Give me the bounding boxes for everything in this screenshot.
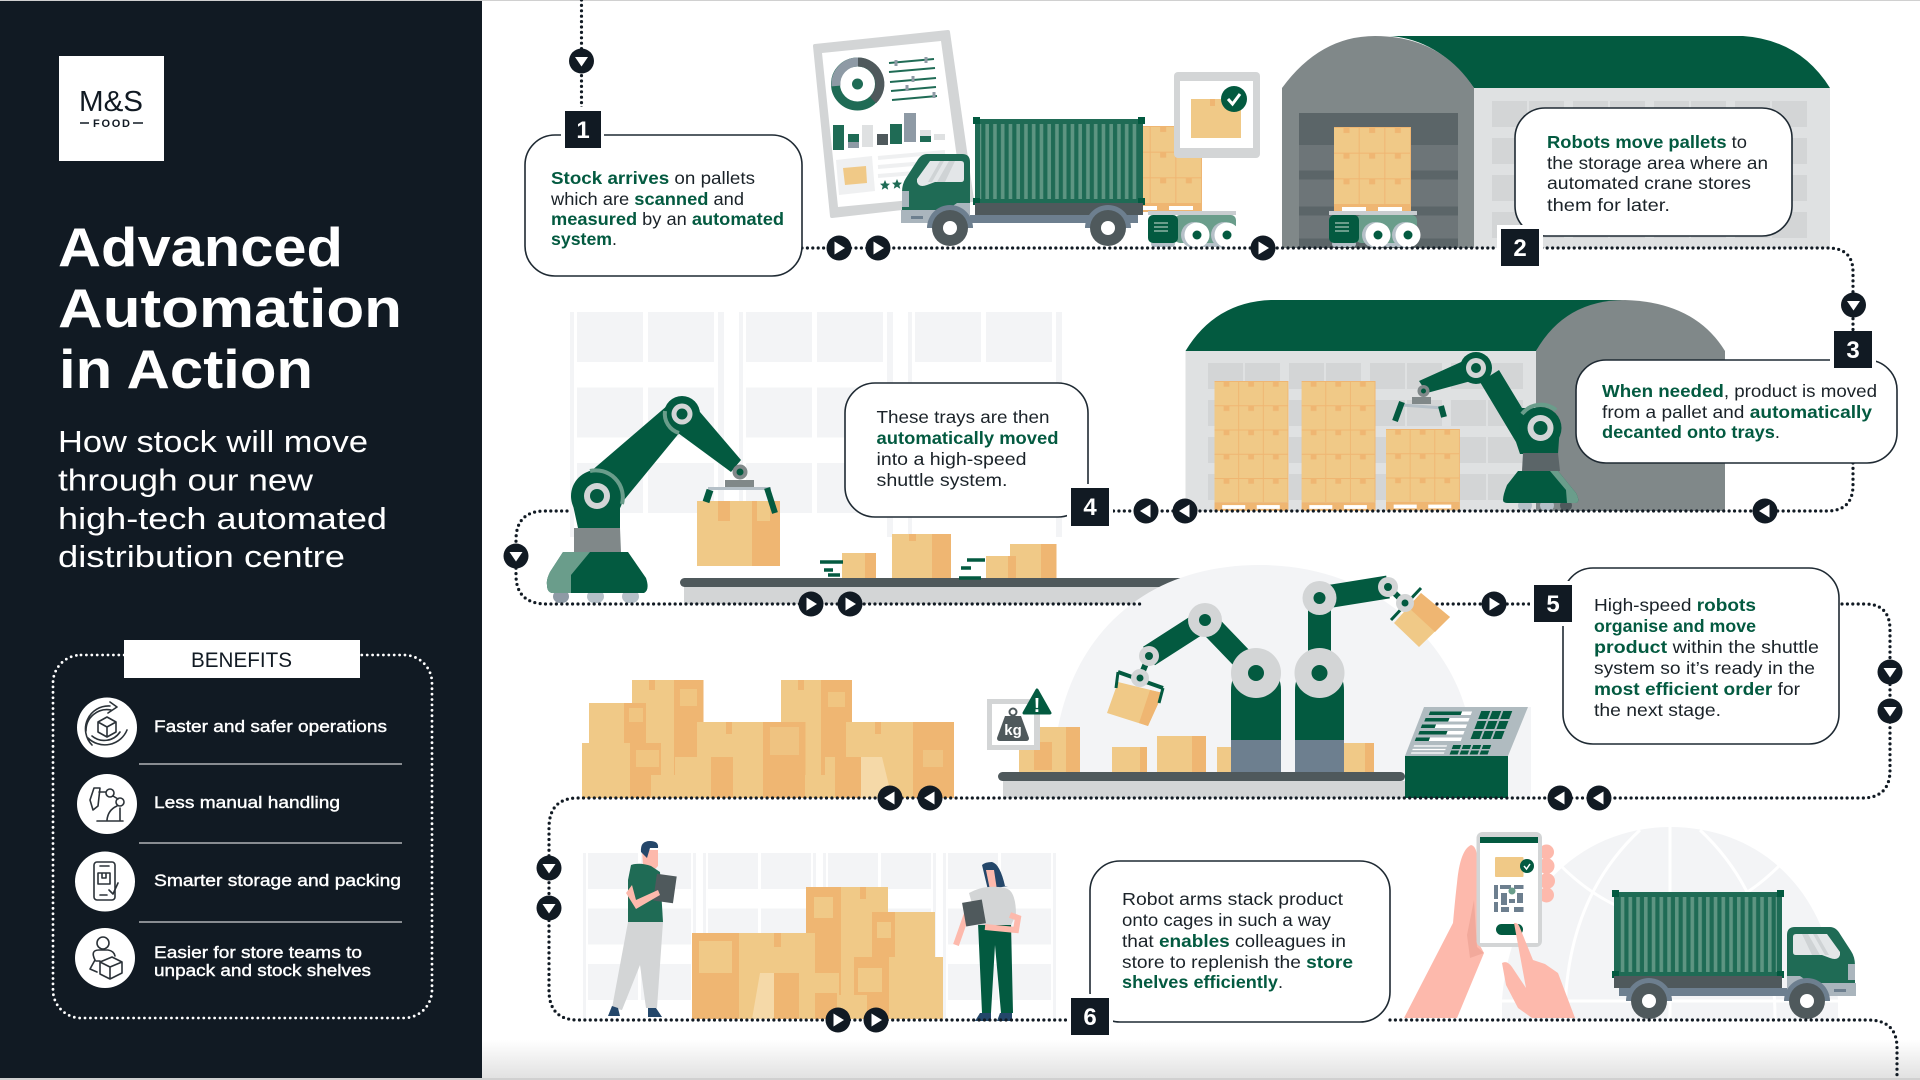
callout: step 3: When needed , product is moved — [1602, 381, 1877, 401]
callout: step 5: system so it’s ready in the — [1594, 658, 1815, 678]
illustration: boxes on conveyor one — [820, 534, 1056, 578]
callout: step 6: store to replenish the store — [1122, 952, 1353, 972]
benefit: less manual handling — [77, 774, 340, 834]
callout: step 5: product within the shuttle — [1594, 637, 1819, 657]
illustration: weighed and small boxes — [1019, 727, 1374, 772]
callout: step 6: that enables colleagues in — [1122, 931, 1346, 951]
callout: step 5: High-speed robots — [1594, 595, 1756, 615]
number badge 4 — [1067, 484, 1113, 526]
logo: M&S Food — [59, 56, 164, 161]
benefit: smarter storage: Smarter storage and packing — [154, 871, 401, 890]
callout: step 6 — [1090, 861, 1390, 1022]
illustration: report tablet — [815, 32, 972, 216]
callout: step 3: from a pallet and automatically — [1602, 402, 1872, 422]
benefit: easier for store teams: Easier for store teams to — [154, 943, 362, 962]
illustration: control kiosk — [1405, 707, 1528, 798]
illustration: box stack row four — [692, 887, 943, 1019]
illustration: conveyor one — [680, 578, 1200, 604]
callout: step 4: shuttle system. — [876, 470, 1008, 490]
panel: benefits — [53, 640, 432, 1018]
robot arm: decant — [1395, 352, 1578, 511]
illustration: scan card — [1174, 72, 1260, 158]
logo: M&S Food: M&S — [79, 86, 143, 118]
illustration: man with clipboard — [608, 841, 677, 1017]
illustration: weight card: ! — [1034, 695, 1040, 717]
title — [58, 216, 402, 400]
number badge 4: 4 — [1083, 494, 1097, 521]
number badge 6: 6 — [1083, 1004, 1097, 1031]
illustration: conveyor two — [998, 772, 1405, 798]
callout: step 2: automated crane stores — [1547, 173, 1751, 193]
benefit: smarter storage — [75, 852, 401, 912]
callout: step 6: Robot arms stack product — [1122, 889, 1343, 909]
illustration: robot carrier — [1148, 211, 1240, 248]
callout: step 4: into a high-speed — [876, 449, 1026, 469]
benefit: easier for store teams: unpack and stock shelves — [154, 961, 371, 980]
illustration: box pile — [582, 680, 954, 798]
illustration: background racks row two — [570, 312, 1065, 537]
illustration: robot dome — [1056, 565, 1531, 798]
illustration: warehouse two — [1186, 300, 1725, 511]
callout: step 5: organise and move — [1594, 616, 1756, 636]
callout: step 1: measured by an automated — [551, 209, 784, 229]
callout: step 1: which are scanned and — [550, 189, 744, 209]
callout: step 3: decanted onto trays . — [1602, 422, 1780, 442]
benefits heading — [124, 640, 360, 678]
callout: step 6: onto cages in such a way — [1122, 910, 1331, 930]
illustration: woman with clipboard — [956, 862, 1018, 1021]
callout: step 5: the next stage. — [1594, 700, 1721, 720]
flow arrows — [504, 48, 1902, 1032]
title: Automation — [58, 277, 402, 339]
callout: step 5: most efficient order for — [1594, 679, 1800, 699]
bottom edge line — [0, 1078, 1920, 1080]
callout: step 3 — [1576, 360, 1897, 463]
callout: step 1: system. — [551, 229, 617, 249]
top edge line — [0, 0, 1920, 1]
number badge 5: 5 — [1546, 591, 1560, 618]
illustration: background racks row four — [583, 853, 1063, 1019]
subtitle: high-tech automated — [58, 501, 387, 536]
number badge 3 — [1830, 331, 1876, 372]
illustration: weight card — [987, 690, 1050, 750]
callout: step 1 — [525, 135, 802, 276]
callout: step 2 — [1515, 108, 1792, 236]
callout: step 4 — [845, 383, 1088, 517]
callout: step 6: shelves efficiently . — [1122, 972, 1283, 992]
callout: step 5 — [1563, 568, 1839, 744]
page edge shading — [482, 1040, 1920, 1080]
benefit: faster and safer: Faster and safer operations — [154, 717, 387, 736]
callout: step 4: These trays are then — [876, 407, 1050, 427]
benefit: easier for store teams — [75, 928, 371, 988]
title: in Action — [59, 338, 313, 400]
subtitle: How stock will move — [58, 424, 368, 459]
number badge 5 — [1530, 581, 1576, 626]
number badge 3: 3 — [1846, 337, 1860, 364]
illustration: globe — [1502, 827, 1838, 1019]
benefit: less manual handling: Less manual handling — [154, 793, 340, 812]
illustration: weight card: kg — [1004, 722, 1022, 739]
illustration: departing truck — [1612, 890, 1856, 1019]
benefits heading: BENEFITS — [191, 649, 292, 672]
illustration: phone in hands — [1404, 832, 1575, 1018]
callout: step 4: automatically moved — [876, 428, 1058, 448]
route: dotted flow line — [516, 0, 1897, 1080]
benefit: faster and safer — [77, 698, 387, 758]
title: Advanced — [58, 216, 343, 278]
subtitle: through our new — [58, 462, 314, 498]
callout: step 2: the storage area where an — [1547, 153, 1768, 173]
subtitle: distribution centre — [58, 539, 345, 574]
number badge 1 — [561, 107, 604, 151]
callout: step 2: them for later. — [1547, 195, 1670, 215]
number badge 2 — [1497, 225, 1543, 266]
number badge 2: 2 — [1513, 235, 1527, 262]
panel: sidebar — [0, 1, 482, 1078]
subtitle — [58, 424, 387, 574]
number badge 6 — [1067, 994, 1113, 1036]
illustration: arriving truck — [901, 117, 1145, 246]
illustration: robot arm one with box — [547, 396, 780, 603]
illustration: twin robot arms — [1107, 577, 1450, 772]
logo: M&S Food: FOOD — [93, 118, 130, 130]
number badge 1: 1 — [576, 117, 590, 144]
callout: step 2: Robots move pallets to — [1547, 132, 1747, 152]
illustration: warehouse one — [1282, 36, 1830, 248]
callout: step 1: Stock arrives on pallets — [551, 168, 755, 188]
illustration: pallet behind truck — [1125, 126, 1202, 212]
